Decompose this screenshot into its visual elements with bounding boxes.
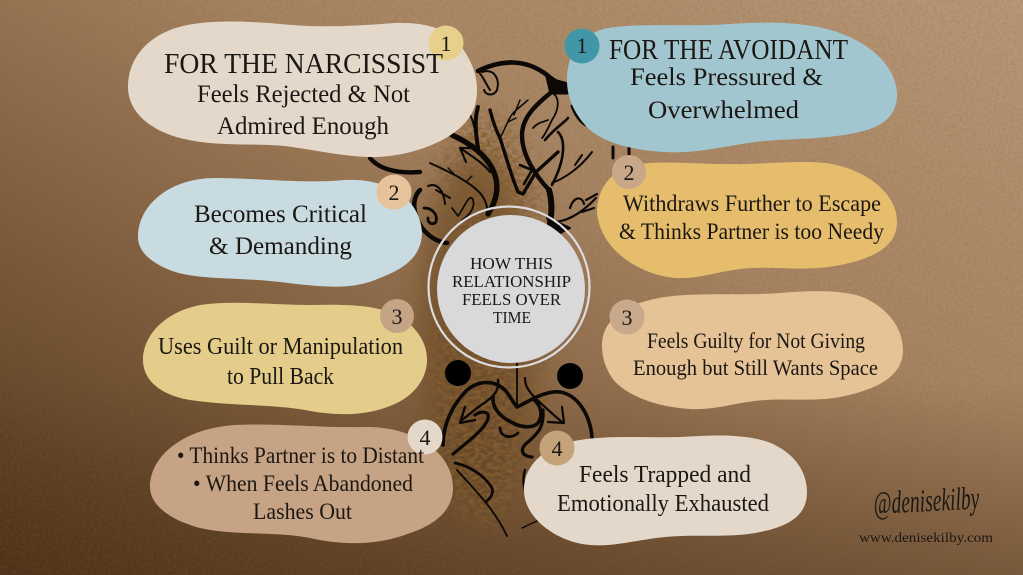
text block: • When Feels Abandoned: [193, 471, 413, 496]
number badge 1: [564, 28, 600, 64]
number badge 2: 2: [624, 160, 634, 185]
text block: Lashes Out: [253, 499, 353, 524]
text block: Feels Guilty for Not Giving: [647, 328, 865, 353]
text block: [158, 334, 403, 390]
panel: avoidant step 2: [597, 155, 897, 278]
center circle: how this relationship feels over time: FEELS OVER: [462, 290, 561, 309]
text block: [197, 81, 410, 140]
intertwined figures and arrows: [443, 362, 592, 536]
text block: & Thinks Partner is too Needy: [619, 219, 884, 244]
signature and website: [859, 479, 993, 546]
text block: Admired Enough: [217, 113, 389, 140]
number badge 3: [380, 299, 414, 333]
left figure head: [445, 360, 471, 386]
panel: narcissist step 4: [150, 420, 453, 543]
tree and figures illustration: [370, 62, 629, 536]
text block: Overwhelmed: [648, 97, 800, 124]
text block: Feels Rejected & Not: [197, 81, 410, 108]
number badge 4: 4: [420, 425, 430, 450]
text block: [194, 201, 367, 260]
number badge 1: 1: [576, 33, 588, 58]
number badge 3: 3: [622, 305, 632, 330]
number badge 4: [540, 430, 574, 466]
text block: Becomes Critical: [194, 201, 367, 228]
panel: narcissist step 1: [128, 22, 477, 157]
text block: [619, 191, 884, 244]
center circle: how this relationship feels over time: TIME: [493, 308, 531, 327]
number badge 3: [610, 300, 644, 334]
text block: Uses Guilt or Manipulation: [158, 334, 403, 360]
number badge 2: [376, 174, 412, 210]
text block: to Pull Back: [227, 364, 334, 390]
panel: avoidant step 4: [524, 430, 807, 545]
heading: for the narcissist: FOR THE NARCISSIST: [164, 48, 443, 80]
center circle: how this relationship feels over time: [428, 206, 590, 368]
number badge 2: [612, 155, 646, 189]
text block: [177, 443, 425, 524]
signature and website: www.denisekilby.com: [859, 531, 993, 546]
number badge 3: 3: [392, 304, 402, 329]
panel: avoidant step 1: [564, 23, 897, 152]
number badge 4: [408, 420, 442, 454]
right figure head: [557, 363, 583, 389]
number badge 2: 2: [388, 180, 400, 205]
number badge 4: 4: [552, 436, 562, 461]
text block: & Demanding: [209, 233, 352, 260]
text block: Feels Trapped and: [579, 462, 751, 488]
heading: for the avoidant: FOR THE AVOIDANT: [609, 35, 848, 66]
center circle: how this relationship feels over time: RELATIONSHIP: [452, 272, 571, 291]
text block: Emotionally Exhausted: [557, 491, 769, 517]
text block: [630, 64, 823, 124]
text block: Enough but Still Wants Space: [633, 355, 878, 380]
panel: narcissist step 2: [138, 174, 422, 287]
text block: [557, 462, 769, 517]
panel: narcissist step 3: [143, 299, 427, 414]
text block: Withdraws Further to Escape: [623, 191, 881, 216]
number badge 1: [428, 26, 464, 60]
panel: avoidant step 3: [602, 291, 903, 409]
text block: Feels Pressured &: [630, 64, 823, 91]
text block: [633, 328, 878, 380]
upper tree branches: [370, 62, 629, 243]
number badge 1: 1: [440, 31, 452, 56]
text block: • Thinks Partner is to Distant: [177, 443, 425, 468]
center circle: how this relationship feels over time: HOW THIS: [470, 254, 553, 273]
